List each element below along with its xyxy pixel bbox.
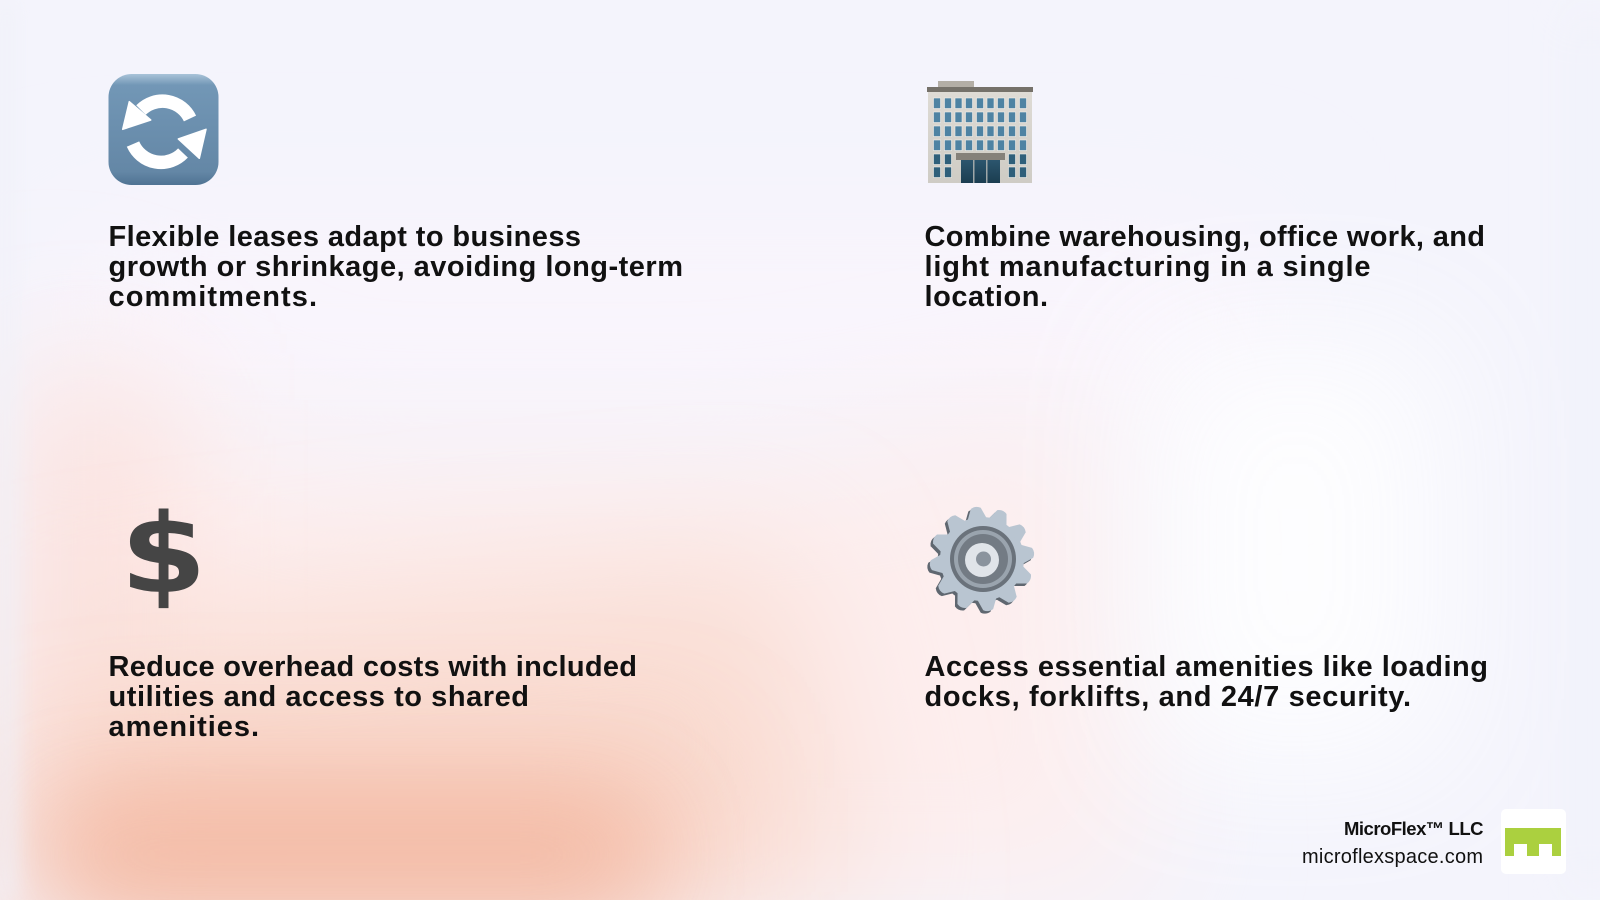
brand text: MicroFlex™ LLC	[1344, 818, 1484, 839]
text: reduce overhead: utilities and access to shared	[108, 681, 529, 713]
text: combine warehousing: Combine warehousing, office work, and	[924, 221, 1485, 253]
text: flexible leases	[108, 221, 683, 313]
icon: dollar sign: $	[120, 490, 207, 618]
icon: gear	[921, 500, 1041, 620]
text: combine warehousing	[924, 221, 1485, 313]
brand text: microflexspace.com	[1302, 846, 1483, 868]
text: flexible leases: commitments.	[108, 281, 317, 313]
text: flexible leases: growth or shrinkage, avoiding long-term	[108, 251, 683, 283]
logo	[1501, 809, 1566, 874]
text: reduce overhead: Reduce overhead costs with included	[108, 651, 637, 683]
text: combine warehousing: light manufacturing in a single	[924, 251, 1370, 283]
text: reduce overhead	[108, 651, 637, 743]
text: combine warehousing: location.	[924, 281, 1048, 313]
text: reduce overhead: amenities.	[108, 711, 259, 743]
brand text	[1302, 818, 1484, 868]
icon: refresh arrows	[108, 74, 218, 185]
text: access amenities: Access essential amenities like loading	[924, 651, 1488, 683]
icon: office building	[927, 81, 1033, 183]
text: access amenities: docks, forklifts, and 24/7 security.	[924, 681, 1411, 713]
text: access amenities	[924, 651, 1488, 713]
text: flexible leases: Flexible leases adapt to business	[108, 221, 581, 253]
